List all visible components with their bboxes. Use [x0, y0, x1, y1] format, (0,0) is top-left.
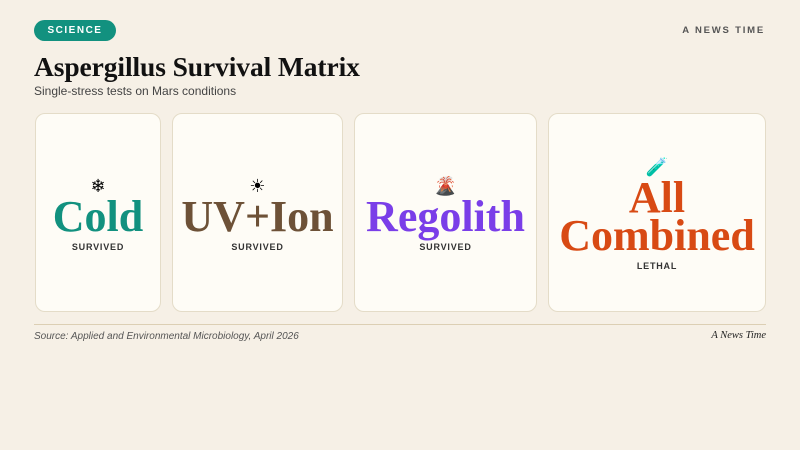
panel: regolith: 🌋 — [434, 176, 457, 196]
panel: all combined: All — [629, 172, 685, 222]
panel: all combined: 🧪 — [646, 156, 668, 178]
panel: all combined — [548, 113, 766, 312]
subtitle: Single-stress tests on Mars conditions — [34, 84, 236, 98]
source: Source: Applied and Environmental Microbiology, April 2026 — [34, 331, 299, 342]
tag pill — [34, 20, 116, 41]
panel: uv+ion: SURVIVED — [231, 242, 284, 252]
panel: cold — [35, 113, 161, 312]
panel: uv+ion — [172, 113, 343, 312]
title: Aspergillus Survival Matrix — [34, 51, 360, 82]
panel: all combined: LETHAL — [637, 260, 677, 270]
panel: cold: SURVIVED — [72, 242, 124, 252]
panel: regolith — [354, 113, 537, 312]
footer brand: A News Time — [711, 330, 766, 341]
panel: uv+ion: ☀ — [249, 176, 266, 196]
tag pill: SCIENCE — [48, 25, 102, 36]
panel: cold: Cold — [53, 192, 143, 240]
brand: A NEWS TIME — [682, 25, 765, 36]
panel: regolith: SURVIVED — [419, 242, 472, 252]
panel: all combined: Combined — [559, 210, 755, 260]
panel: cold: ❄ — [90, 176, 106, 196]
panel: uv+ion: UV+Ion — [181, 192, 334, 240]
panel: regolith: Regolith — [366, 192, 525, 240]
